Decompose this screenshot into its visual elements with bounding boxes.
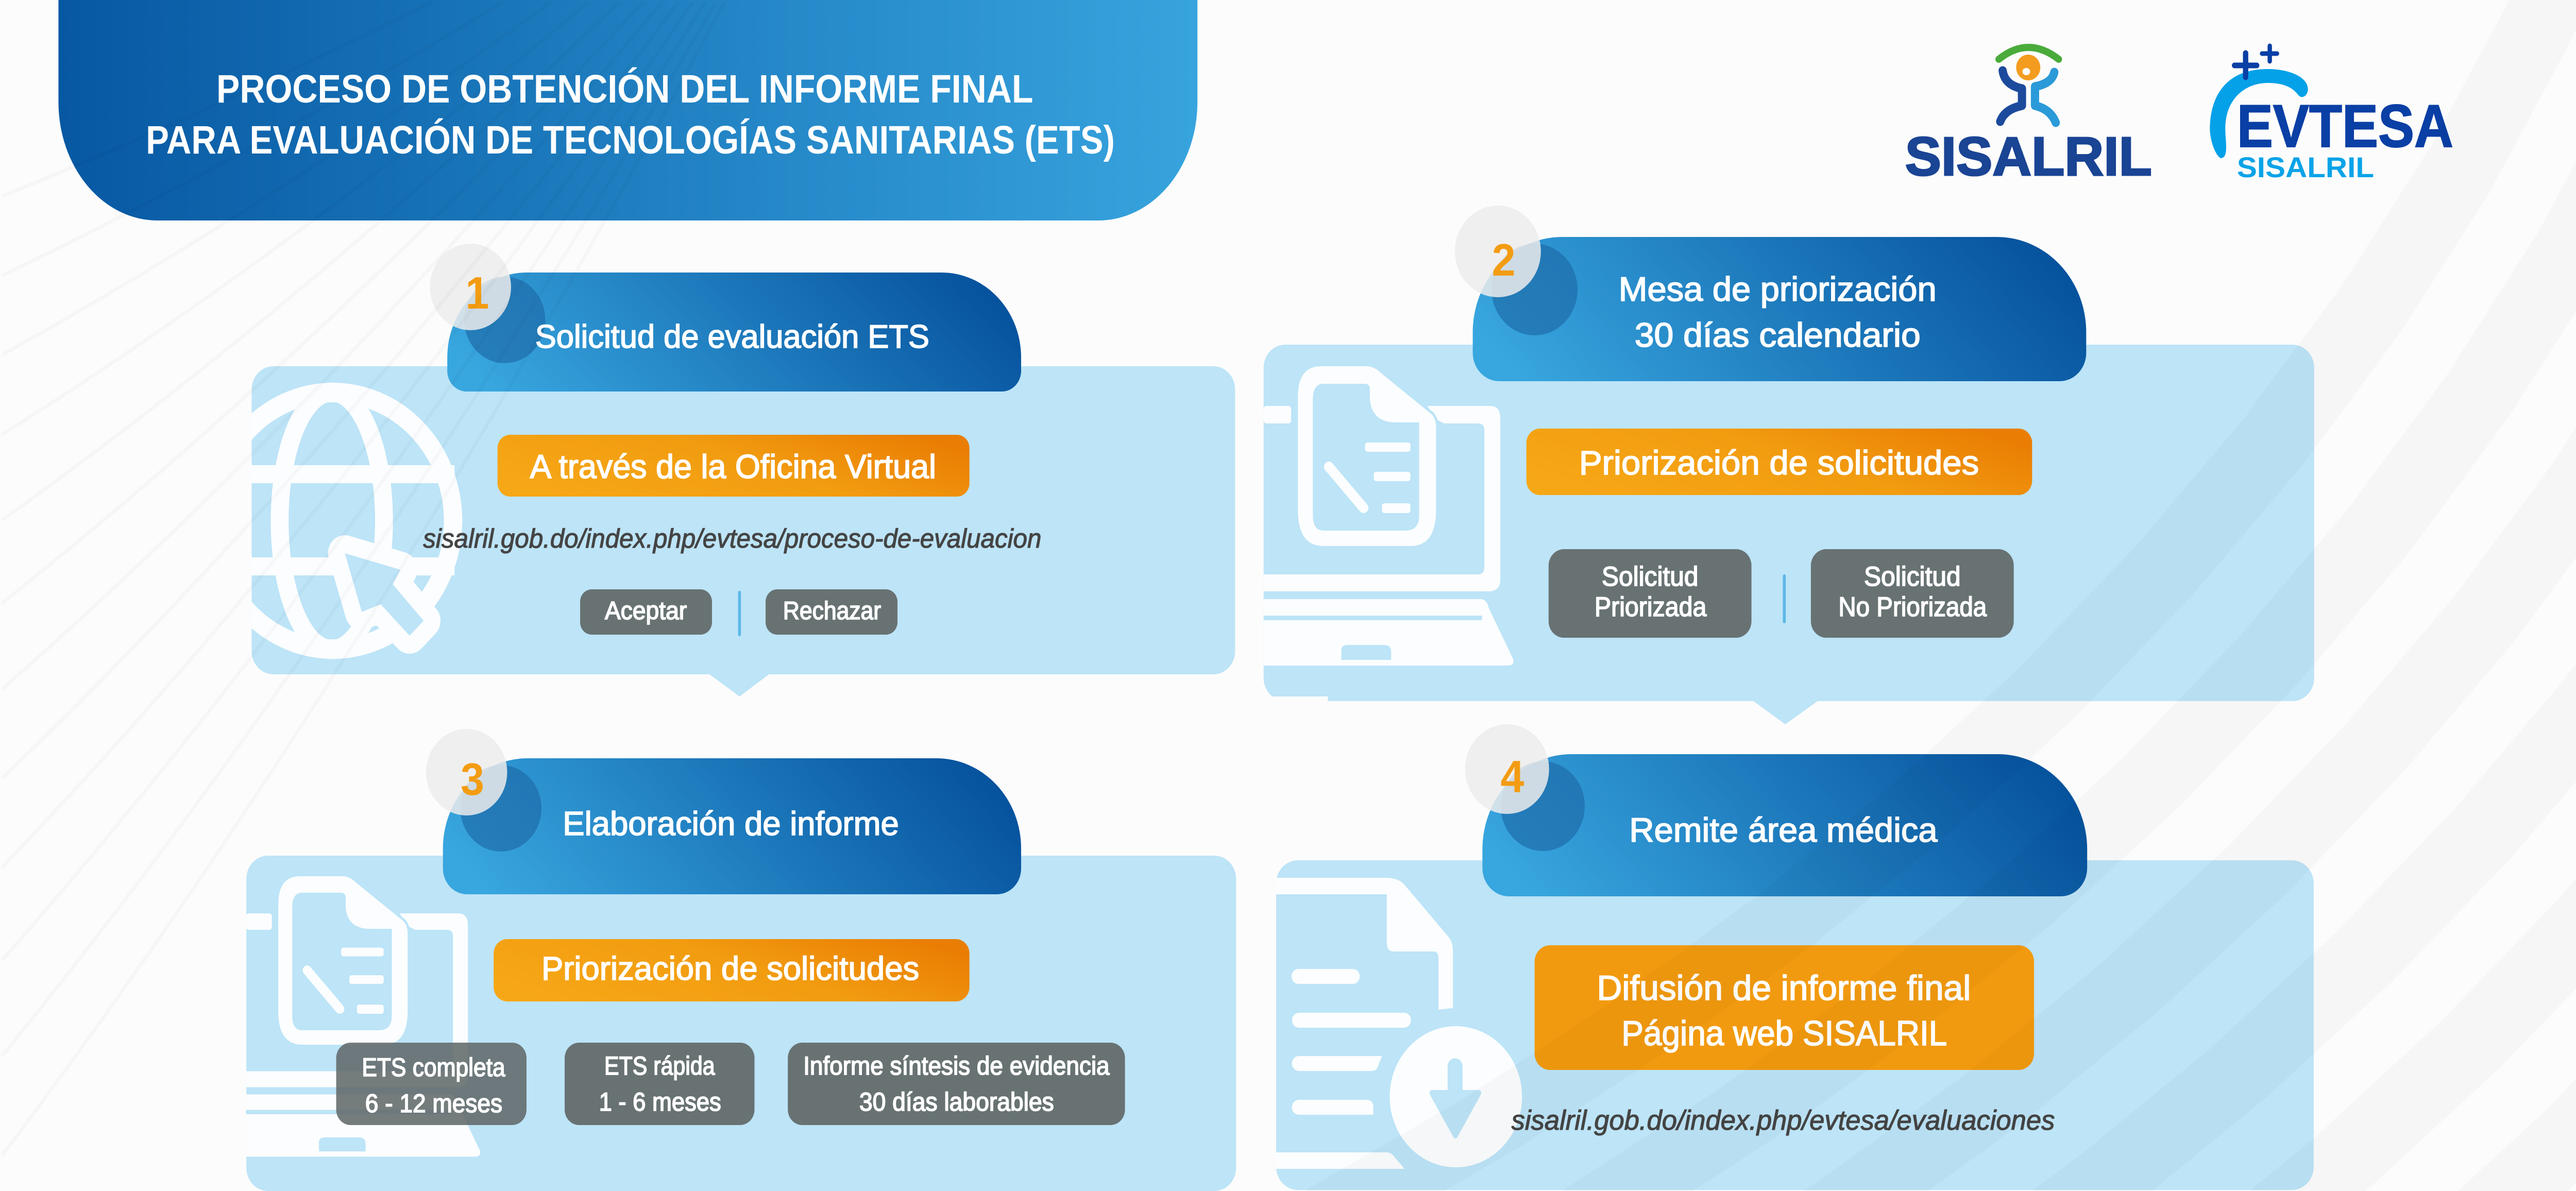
orange label: priorización	[1527, 429, 2032, 495]
heading tab: step 3: 3	[461, 755, 484, 805]
heading tab: step 1: Solicitud de evaluación ETS	[535, 318, 929, 354]
heading tab: step 2	[1455, 206, 2086, 381]
orange label: oficina virtual	[498, 435, 970, 497]
box: solicitud priorizada	[1549, 549, 1752, 638]
logo: EVTESA: EVTESA	[2237, 93, 2453, 160]
heading tab: step 3: Elaboración de informe	[563, 805, 899, 842]
heading tab: step 4: 4	[1501, 752, 1524, 803]
box: solicitud no priorizada: Solicitud	[1864, 561, 1961, 591]
heading tab: step 4	[1465, 724, 2087, 896]
title: PROCESO DE OBTENCIÓN DEL INFORME FINAL	[216, 66, 1033, 111]
header banner	[58, 0, 1197, 220]
panel: step 4	[1276, 724, 2314, 1190]
orange label: priorización	[494, 939, 970, 1001]
box: ETS rápida	[565, 1043, 754, 1125]
icon: document with download	[1276, 878, 1522, 1169]
box: solicitud no priorizada: No Priorizada	[1838, 591, 1987, 622]
panel: step 2	[1261, 206, 2314, 724]
orange label: difusión	[1535, 945, 2034, 1070]
orange label: difusión: Página web SISALRIL	[1621, 1013, 1947, 1052]
title: PARA EVALUACIÓN DE TECNOLOGÍAS SANITARIAS (ETS)	[146, 117, 1115, 162]
orange label: priorización: Priorización de solicitudes	[541, 950, 919, 987]
box: solicitud priorizada: Priorizada	[1595, 591, 1707, 622]
box: ETS completa: ETS completa	[362, 1053, 505, 1082]
logo: SISALRIL	[1905, 47, 2152, 187]
heading tab: step 2: Mesa de priorización	[1619, 270, 1937, 308]
box: ETS rápida: ETS rápida	[604, 1052, 715, 1080]
orange label: difusión: Difusión de informe final	[1597, 968, 1971, 1007]
panel: step 3	[246, 729, 1236, 1191]
heading tab: step 1: 1	[465, 268, 489, 319]
button: Rechazar	[766, 589, 897, 635]
link text: sisalril.gob.do/index.php/evtesa/proceso-de-evaluacion	[423, 523, 1041, 553]
logo: SISALRIL: SISALRIL	[1905, 126, 2152, 187]
box: solicitud priorizada: Solicitud	[1602, 561, 1698, 591]
icon: laptop with document	[246, 876, 480, 1156]
heading tab: step 4: Remite área médica	[1629, 811, 1938, 849]
heading tab: step 3	[426, 729, 1021, 894]
title	[146, 66, 1115, 162]
box: solicitud no priorizada	[1811, 549, 2014, 638]
orange label: priorización: Priorización de solicitudes	[1579, 444, 1979, 482]
box: informe síntesis: 30 días laborables	[859, 1088, 1054, 1116]
heading tab: step 1	[430, 244, 1021, 392]
box: ETS completa: 6 - 12 meses	[365, 1090, 502, 1118]
box: informe síntesis: Informe síntesis de evidencia	[803, 1052, 1110, 1080]
box: ETS rápida: 1 - 6 meses	[599, 1088, 721, 1116]
icon: globe with cursor	[213, 392, 454, 650]
link text: sisalril.gob.do/index.php/evtesa/evaluaciones	[1512, 1105, 2055, 1136]
box: informe síntesis	[788, 1043, 1125, 1125]
button: Aceptar	[580, 589, 712, 635]
button: Rechazar: Rechazar	[783, 597, 881, 625]
heading tab: step 2: 2	[1492, 235, 1516, 286]
box: ETS completa	[336, 1043, 527, 1125]
heading tab: step 2: 30 días calendario	[1635, 316, 1921, 354]
orange label: oficina virtual: A través de la Oficina Virtual	[530, 448, 936, 485]
logo: EVTESA	[2210, 46, 2453, 183]
icon: laptop with document	[1264, 366, 1514, 666]
logo: EVTESA: SISALRIL	[2237, 151, 2374, 183]
button: Aceptar: Aceptar	[605, 597, 687, 625]
panel: step 1	[213, 244, 1235, 696]
